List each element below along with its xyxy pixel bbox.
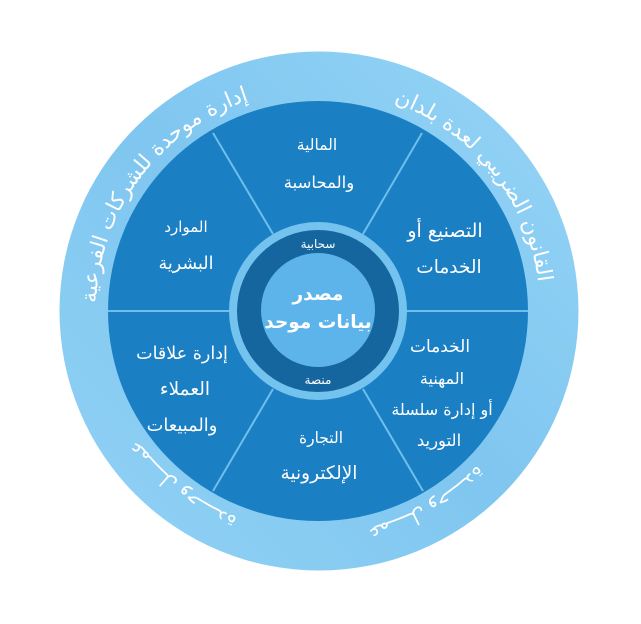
hub light ring bbox=[229, 222, 407, 400]
hub centre bbox=[261, 253, 375, 367]
segment: finance: المالية bbox=[297, 136, 337, 154]
segment: customer relations: إدارة علاقات bbox=[136, 344, 228, 364]
segment: e-commerce bbox=[281, 429, 357, 484]
segment: manufacturing: الخدمات bbox=[416, 257, 482, 278]
segment: customer relations bbox=[136, 344, 228, 436]
middle segments disc bbox=[108, 101, 528, 521]
segment: manufacturing bbox=[406, 218, 483, 278]
ring label: business unit left: عمــــل وحــــدة bbox=[132, 443, 236, 526]
segment: human resources: البشرية bbox=[158, 254, 214, 274]
segment: human resources: الموارد bbox=[164, 218, 208, 236]
hub title bbox=[264, 284, 372, 333]
segment dividers bbox=[108, 133, 528, 491]
ring label: subsidiaries: إدارة موحدة للشركات الفرعية bbox=[85, 85, 249, 302]
outer ring bbox=[60, 52, 578, 570]
segment: professional services bbox=[391, 337, 493, 451]
segment: e-commerce: التجارة bbox=[299, 429, 343, 447]
hub label: cloud: سحابية bbox=[301, 237, 335, 251]
hub title: مصدر bbox=[291, 284, 344, 305]
hub title: بيانات موحد bbox=[264, 312, 372, 333]
wheel diagram bbox=[60, 52, 578, 570]
segment: customer relations: العملاء bbox=[160, 379, 210, 400]
ring label: tax law: القانون الضريبي لعدة بلدان bbox=[395, 94, 554, 280]
segment: professional services: التوريد bbox=[417, 431, 461, 451]
segment: human resources bbox=[158, 218, 214, 274]
segment: professional services: الخدمات bbox=[410, 337, 470, 357]
segment: professional services: أو إدارة سلسلة bbox=[391, 399, 493, 420]
segment: customer relations: والمبيعات bbox=[147, 415, 217, 436]
segment: finance bbox=[284, 136, 354, 193]
segment: professional services: المهنية bbox=[420, 369, 464, 389]
hub label: platform: منصة bbox=[305, 373, 331, 387]
segment: finance: والمحاسبة bbox=[284, 173, 354, 193]
ring label: business unit right: عمــــل وحــــدة bbox=[370, 467, 483, 536]
hub dark ring bbox=[237, 230, 399, 392]
segment: e-commerce: الإلكترونية bbox=[281, 463, 357, 484]
segment: manufacturing: التصنيع أو bbox=[406, 218, 483, 242]
